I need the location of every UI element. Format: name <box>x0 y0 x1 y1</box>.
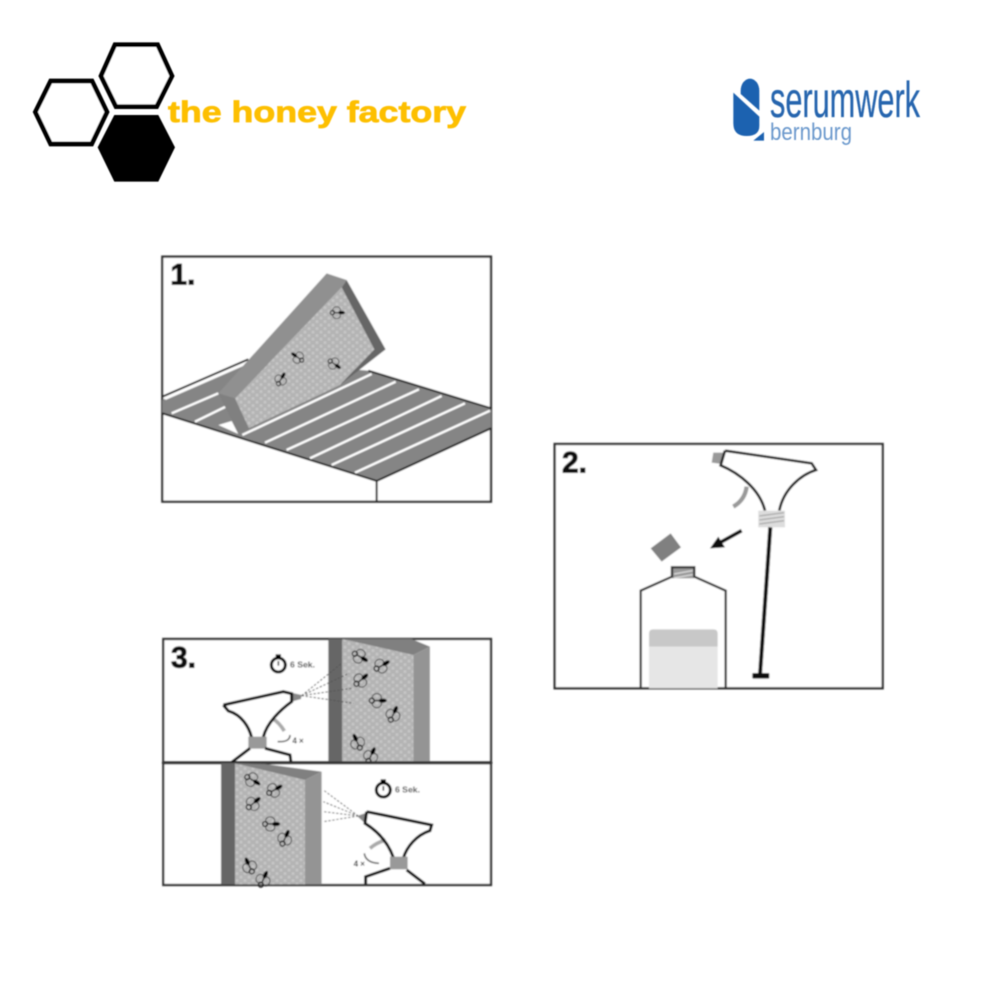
panel: step 3 bottom spraying second side <box>163 763 491 890</box>
spray head <box>712 451 816 527</box>
spray bottle head <box>357 812 432 884</box>
spray bottle head <box>223 692 302 762</box>
icon: honeycomb hexagons <box>35 45 175 182</box>
bees on comb <box>347 646 404 766</box>
step number 3: 3. <box>171 641 196 674</box>
stopwatch 6 Sek. <box>376 779 420 797</box>
stopwatch 6 Sek.: 6 Sek. <box>290 660 315 670</box>
logo: serumwerk bernburg <box>733 72 921 146</box>
bottle <box>641 567 726 688</box>
wordmark bernburg: bernburg <box>770 119 852 146</box>
pump count 4x: 4 × <box>354 860 365 869</box>
panel: step 1 place comb on table <box>162 257 491 502</box>
bees on comb <box>239 770 295 890</box>
pump count 4x <box>278 735 304 746</box>
comb frame upright <box>221 763 322 890</box>
logo: the honey factory <box>35 45 466 182</box>
step number 2: 2. <box>562 446 587 479</box>
panel: step 3 top spraying first side <box>163 639 491 766</box>
panel: step 2 add strip to bottle <box>555 444 883 688</box>
pump count 4x: 4 × <box>292 737 304 746</box>
comb frame upright <box>328 639 430 766</box>
step number 1: 1. <box>170 259 195 292</box>
brand name: the honey factory <box>168 96 466 129</box>
arrow to bottle <box>710 531 742 548</box>
strip being dropped <box>651 533 681 562</box>
icon: serumwerk S mark <box>733 79 764 141</box>
spray mist <box>302 663 354 703</box>
dip tube <box>752 527 770 679</box>
stopwatch 6 Sek. <box>271 654 315 672</box>
honeycomb frame leaning on table <box>218 273 386 434</box>
spray mist <box>323 790 358 822</box>
stopwatch 6 Sek.: 6 Sek. <box>395 785 420 795</box>
pump count 4x <box>354 853 379 869</box>
table top with stripes <box>162 359 491 502</box>
bees on comb <box>272 307 345 388</box>
